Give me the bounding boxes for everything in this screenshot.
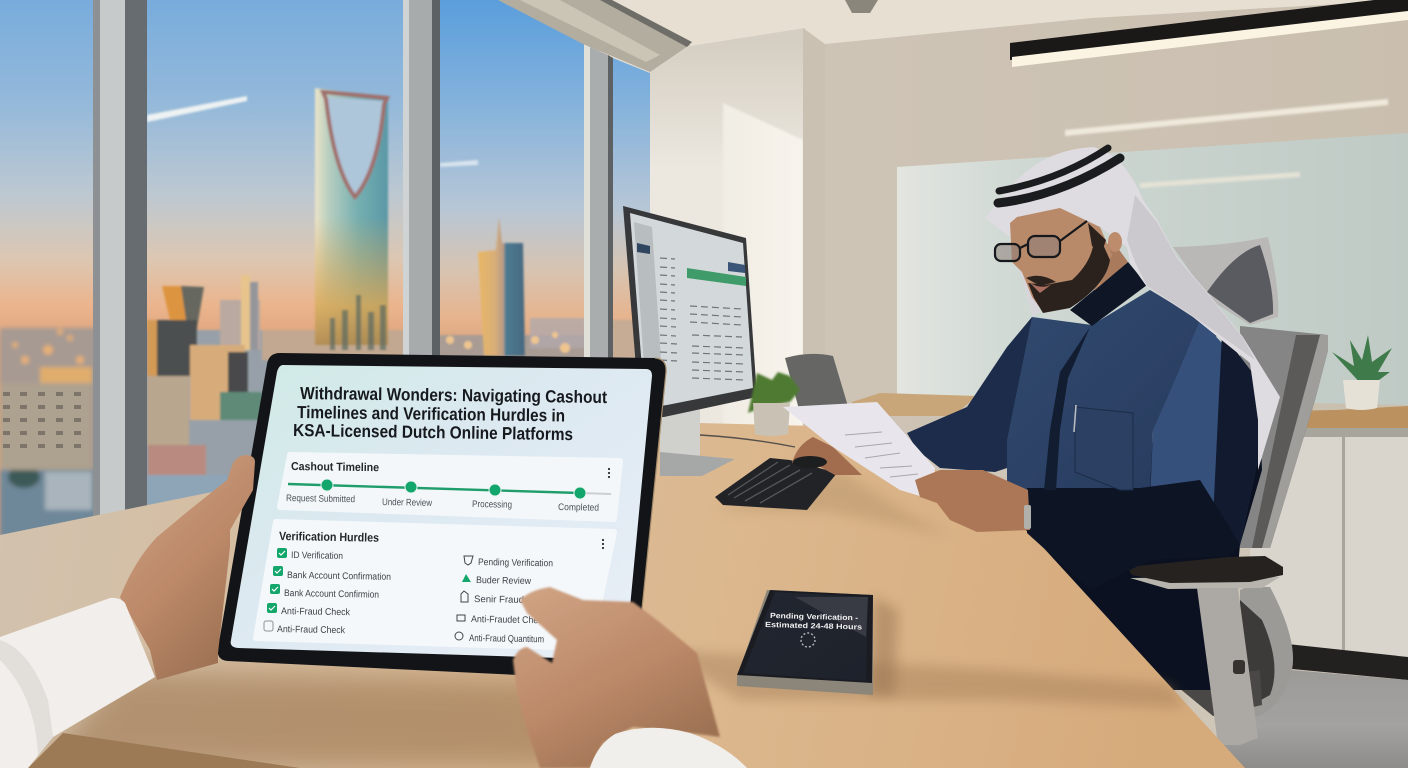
- forearm: [1027, 480, 1240, 590]
- window blind soffit: [498, 0, 692, 72]
- shirt pocket: [1075, 407, 1133, 490]
- empty visitor chair: [785, 354, 850, 413]
- timeline track: [580, 493, 611, 494]
- cable: [700, 435, 795, 447]
- checklist labels: Senir Fraud: [474, 594, 524, 606]
- seated man: [907, 147, 1280, 590]
- ceiling light: [1010, 0, 1408, 67]
- keyboard: [715, 458, 837, 510]
- window frames: [93, 0, 613, 530]
- timeline labels: Processing: [472, 499, 512, 511]
- more menu: [602, 539, 604, 549]
- card: cashout timeline: [280, 455, 620, 519]
- tablet title: Timelines and Verification Hurdles in: [297, 402, 565, 426]
- hair: [1088, 223, 1106, 252]
- center pane skyline: [140, 275, 410, 520]
- timeline labels: [286, 493, 599, 514]
- tablet: [218, 353, 666, 680]
- checklist labels: Anti-Fraud Check: [277, 624, 345, 636]
- smartphone: [737, 590, 873, 695]
- desk front edge: [28, 733, 300, 768]
- monitor green bar: [687, 268, 746, 286]
- man's near hand: [915, 470, 1031, 532]
- robe tassel: [1044, 327, 1090, 490]
- headband ring: [998, 148, 1120, 203]
- back counter and cabinets: [852, 393, 1408, 768]
- more menu: [608, 468, 610, 478]
- monitor sidebar: [634, 222, 664, 407]
- desk shadows: [40, 470, 1185, 768]
- watch: [1024, 505, 1031, 529]
- checklist labels: Anti-Fraud Check: [281, 606, 350, 618]
- desk plant: [748, 372, 800, 436]
- checklist labels: ID Verification: [291, 550, 343, 562]
- card: verification hurdles: Verification Hurdles: [279, 529, 379, 545]
- pen: [1074, 405, 1076, 432]
- headdress drape: [1018, 262, 1040, 317]
- ceiling vent: [845, 0, 878, 13]
- chair support curve: [1240, 587, 1293, 718]
- card: verification hurdles: [256, 522, 614, 648]
- left building windows: [3, 392, 81, 448]
- hand holding tablet: [0, 455, 255, 768]
- shirt cuff: [0, 598, 155, 768]
- pointing hand: [513, 587, 747, 768]
- checklist labels: Anti-Fraud Quantitum: [469, 633, 544, 645]
- back wall: [650, 0, 1408, 430]
- chair seat: [1173, 670, 1262, 716]
- beard: [1028, 238, 1110, 313]
- collar: [1070, 262, 1147, 326]
- ear: [1108, 232, 1122, 252]
- status icons: [455, 556, 473, 640]
- man's lower body: [1020, 420, 1262, 690]
- desktop monitor: [623, 206, 757, 476]
- checklist labels: Anti-Fraudet Check: [471, 614, 547, 626]
- chair headrest: [1173, 237, 1278, 325]
- checklist labels: [277, 550, 553, 645]
- glass partition: [897, 99, 1408, 405]
- glasses: [995, 221, 1087, 261]
- far sleeve: [907, 317, 1050, 472]
- armrest: [1127, 556, 1283, 745]
- man torso: [1007, 290, 1220, 490]
- completed checks: [267, 548, 287, 613]
- checklist labels: Pending Verification: [478, 557, 553, 569]
- tablet title: KSA-Licensed Dutch Online Platforms: [293, 420, 573, 444]
- checklist labels: Buder Review: [476, 575, 531, 587]
- face: [1010, 208, 1112, 312]
- paper document: [783, 402, 935, 500]
- right pane skyline: [432, 217, 650, 500]
- loading spinner: [801, 633, 815, 647]
- tablet title: Withdrawal Wonders: Navigating Cashout: [300, 383, 607, 407]
- left pane skyline: [0, 328, 100, 540]
- timeline labels: Under Review: [382, 497, 432, 509]
- ceiling: [600, 0, 1408, 80]
- upper arm: [1150, 320, 1262, 556]
- man's far hand on mouse: [792, 437, 862, 475]
- tower base silhouettes: [330, 295, 386, 350]
- monitor table rows: [660, 258, 745, 380]
- phone status message: Pending Verification -: [770, 611, 859, 622]
- tablet title: [293, 383, 607, 444]
- checklist labels: Bank Account Confirmion: [284, 588, 379, 601]
- chair mesh back: [1240, 326, 1328, 548]
- desk: [0, 422, 1245, 768]
- Kingdom Centre tower: [315, 88, 388, 350]
- card: cashout timeline: Cashout Timeline: [291, 461, 379, 474]
- monitor stand: [660, 400, 700, 456]
- neck: [1090, 240, 1128, 290]
- office chair: [1173, 237, 1328, 718]
- city window panes: [0, 0, 650, 540]
- checklist labels: Bank Account Confirmation: [287, 570, 391, 583]
- shirt cuff: [590, 728, 747, 768]
- timeline labels: Request Submitted: [286, 493, 355, 505]
- timeline steps: [321, 479, 586, 499]
- potted plant on counter: [1332, 335, 1392, 410]
- sky glare: [147, 96, 478, 167]
- smartphone: Estimated 24-48 Hours: [765, 620, 862, 632]
- ceiling reflections: [1065, 99, 1388, 188]
- timeline labels: Completed: [558, 502, 599, 514]
